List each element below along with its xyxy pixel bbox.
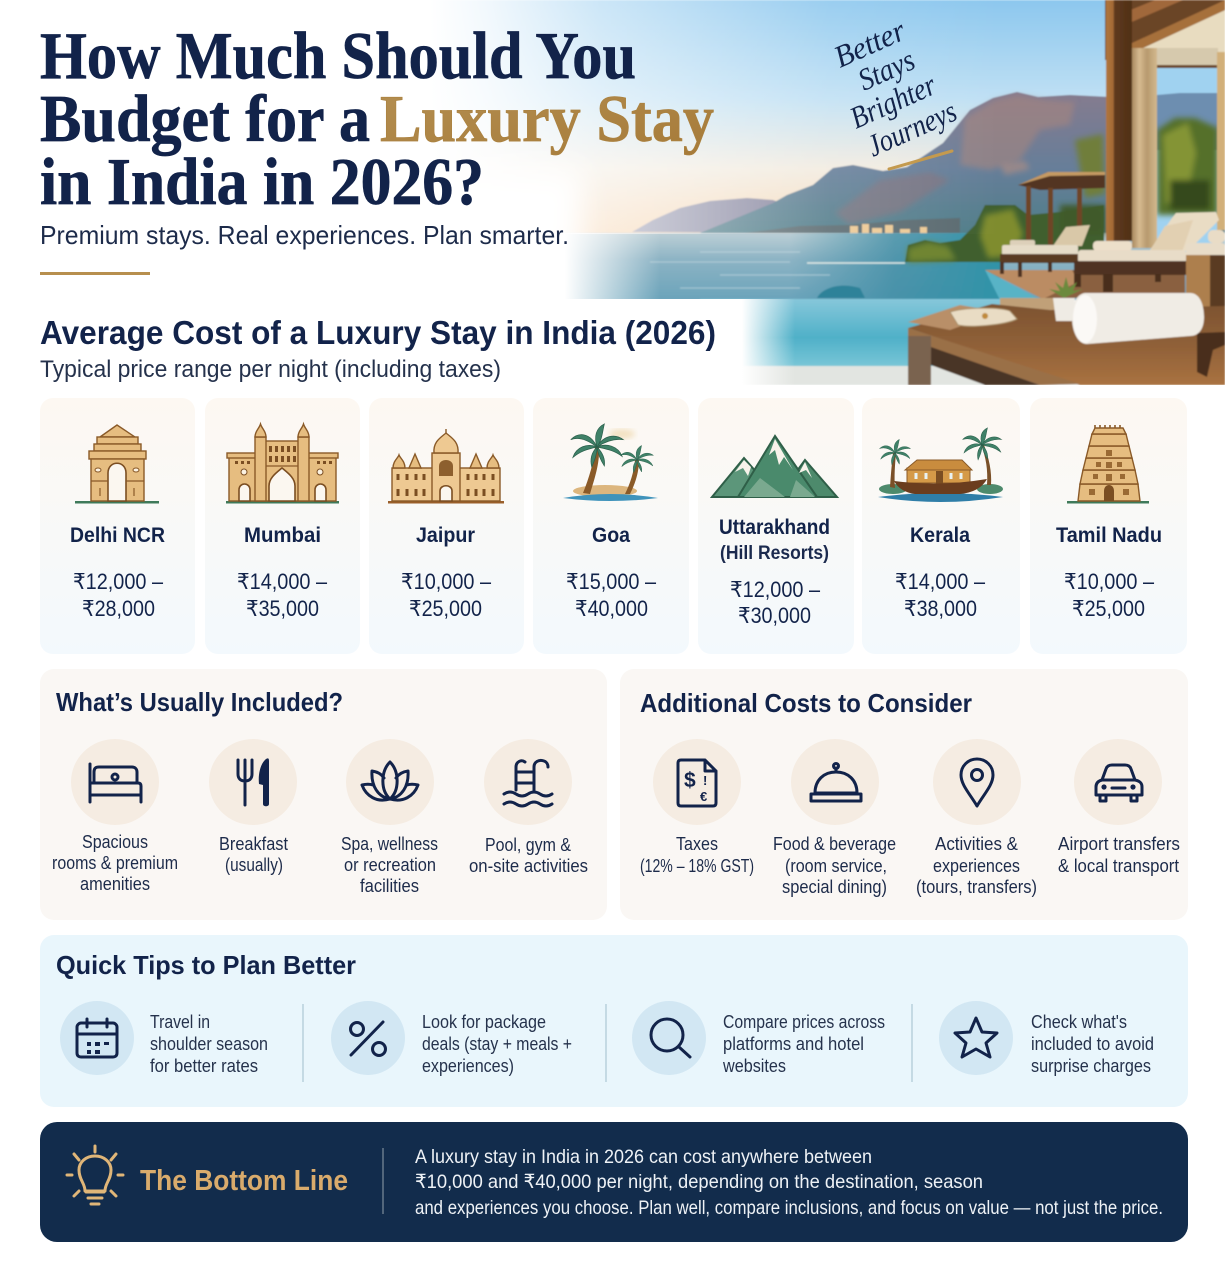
icon: light bulb	[67, 1146, 123, 1204]
card: Uttarakhand	[698, 398, 854, 654]
icon: mountains	[712, 436, 837, 497]
foliage behind terrace	[905, 205, 1104, 262]
handwritten tagline: Stays	[853, 42, 920, 97]
panel heading: Additional Costs to Consider	[640, 688, 972, 718]
tip text: included to avoid	[1031, 1034, 1154, 1054]
price range	[401, 569, 492, 621]
pergola	[1018, 172, 1105, 190]
label	[219, 834, 288, 875]
title: Budget for a	[40, 82, 370, 156]
item: rooms	[52, 739, 178, 894]
label: or recreation	[344, 855, 436, 875]
handwritten tagline	[829, 12, 962, 169]
label	[640, 834, 754, 876]
lounger 3	[1208, 230, 1225, 243]
bottom line text: ₹10,000 and ₹40,000 per night, depending on the destination, season	[415, 1171, 983, 1193]
tip text: websites	[722, 1056, 786, 1076]
item: taxes: !	[703, 773, 707, 788]
tip text: platforms and hotel	[723, 1034, 864, 1054]
handwritten tagline: Journeys	[862, 93, 962, 163]
hero photo: lake, mountains and resort terrace	[464, 0, 1225, 385]
price range	[730, 577, 821, 628]
lakeside village	[754, 218, 960, 233]
city name: Delhi NCR	[70, 524, 165, 547]
tip text: deals (stay + meals +	[422, 1034, 572, 1054]
title: in India in 2026?	[40, 145, 484, 219]
price range	[566, 569, 657, 621]
label	[773, 834, 896, 897]
panel: additional costs	[620, 669, 1188, 920]
infinity pool edge behind terrace	[986, 270, 1034, 298]
bottom line text: A luxury stay in India in 2026 can cost anywhere between	[415, 1146, 872, 1168]
panel: quick tips	[40, 935, 1188, 1107]
price range: ₹40,000	[575, 596, 648, 621]
tip text: Compare prices across	[723, 1012, 885, 1032]
title: How Much Should You	[40, 19, 636, 93]
handwritten tagline: Brighter	[845, 66, 942, 135]
card: Delhi NCR	[40, 398, 195, 654]
distant mountains	[632, 198, 776, 233]
price range: ₹30,000	[738, 603, 811, 628]
label: Breakfast	[219, 834, 288, 854]
city name: Goa	[592, 524, 630, 547]
city name: Tamil Nadu	[1056, 524, 1162, 547]
label: Airport transfers	[1058, 834, 1180, 854]
bottom line heading: The Bottom Line	[140, 1165, 348, 1197]
tip text: Look for package	[422, 1012, 546, 1032]
city name: (Hill Resorts)	[720, 542, 829, 564]
plant pot	[1053, 298, 1075, 321]
item: spa	[341, 739, 438, 896]
city name: Jaipur	[416, 524, 475, 547]
price range: ₹10,000 –	[401, 569, 492, 594]
price range: ₹12,000 –	[73, 569, 164, 594]
table	[999, 297, 1056, 311]
label: special dining)	[782, 877, 887, 897]
label: on-site activities	[469, 856, 588, 876]
label: (room service,	[785, 856, 887, 876]
label: rooms & premium	[52, 853, 178, 873]
price range: ₹14,000 –	[895, 569, 986, 594]
tip text	[150, 1012, 268, 1076]
label	[1058, 834, 1180, 876]
item: taxes	[640, 739, 754, 876]
tip text: Check what's	[1031, 1012, 1127, 1032]
price range: ₹35,000	[246, 596, 319, 621]
price range: ₹25,000	[1072, 596, 1145, 621]
price range	[73, 569, 164, 621]
icon: Gateway of India	[226, 424, 339, 504]
city name: Kerala	[910, 524, 970, 547]
panel heading: What’s Usually Included?	[56, 687, 343, 717]
label: facilities	[360, 876, 419, 896]
label	[469, 835, 588, 876]
handwritten tagline: Better	[829, 12, 911, 74]
panel: the bottom line	[40, 1122, 1188, 1242]
price range: ₹14,000 –	[237, 569, 328, 594]
item: transfers	[1058, 739, 1180, 876]
label: Spacious	[82, 832, 148, 852]
label	[916, 834, 1037, 897]
card: Kerala	[862, 398, 1020, 654]
price range: ₹15,000 –	[566, 569, 657, 594]
item: food	[773, 739, 896, 897]
terrace deck	[1045, 269, 1186, 299]
label	[341, 834, 438, 896]
label: Activities &	[935, 834, 1018, 854]
item: activities	[916, 739, 1037, 897]
bottom line text	[415, 1146, 1163, 1219]
panel heading: Quick Tips to Plan Better	[56, 950, 356, 980]
towel	[1072, 293, 1204, 344]
label: experiences	[933, 856, 1020, 876]
item: taxes: $	[684, 769, 696, 792]
item: taxes: €	[700, 789, 707, 804]
left white fades over the photo	[419, 0, 931, 234]
icon: India Gate	[75, 425, 159, 504]
subtitle: Premium stays. Real experiences. Plan smarter.	[40, 220, 569, 250]
tip text	[1031, 1012, 1154, 1076]
icon: houseboat	[878, 428, 1003, 502]
price range: ₹25,000	[409, 596, 482, 621]
label: Spa, wellness	[341, 834, 438, 854]
tip text: surprise charges	[1031, 1056, 1151, 1076]
label: amenities	[80, 874, 150, 894]
card: Tamil Nadu	[1030, 398, 1187, 654]
tip text	[422, 1012, 572, 1076]
price range	[237, 569, 328, 621]
label: (tours, transfers)	[916, 877, 1037, 897]
price range	[1064, 569, 1155, 621]
building column, beams, ceiling and opening	[1157, 66, 1218, 256]
label: Food & beverage	[773, 834, 896, 854]
city name: Mumbai	[244, 524, 321, 547]
tip: check inclusions	[939, 1001, 1154, 1076]
city name	[719, 516, 830, 564]
card: Mumbai	[205, 398, 360, 654]
tip text: Travel in	[150, 1012, 210, 1032]
section subheading: Typical price range per night (including taxes)	[40, 356, 501, 383]
label: Pool, gym &	[485, 835, 571, 855]
card: Jaipur	[369, 398, 524, 654]
tip: compare prices	[632, 1001, 885, 1076]
plate	[950, 308, 1017, 326]
label: (usually)	[225, 855, 283, 875]
icon: gopuram temple	[1067, 425, 1149, 504]
title	[40, 19, 714, 219]
title: Luxury Stay	[380, 82, 714, 156]
price range	[895, 569, 986, 621]
item: breakfast	[209, 739, 297, 875]
price range: ₹28,000	[82, 596, 155, 621]
panel: what's usually included	[40, 669, 607, 920]
lounger 1	[1053, 225, 1090, 246]
label: Taxes	[676, 834, 718, 854]
tip: shoulder season	[60, 1001, 268, 1076]
tip text: for better rates	[150, 1056, 258, 1076]
gold rule	[40, 272, 150, 275]
card: Goa	[533, 398, 689, 654]
price range: ₹38,000	[904, 596, 977, 621]
price range: ₹10,000 –	[1064, 569, 1155, 594]
label: (12% – 18% GST)	[640, 856, 754, 876]
label	[52, 832, 178, 894]
tip text: shoulder season	[150, 1034, 268, 1054]
icon: Jaipur palace	[388, 429, 504, 504]
section heading: average cost: Average Cost of a Luxury Stay in India (2026)	[40, 314, 716, 351]
tip text: experiences)	[422, 1056, 514, 1076]
tip: package deals	[331, 1001, 572, 1076]
label: & local transport	[1058, 856, 1179, 876]
tip text	[722, 1012, 885, 1076]
lounger 2	[1150, 212, 1219, 251]
icon: palm island	[563, 424, 658, 501]
city name: Uttarakhand	[719, 516, 830, 539]
price range: ₹12,000 –	[730, 577, 821, 602]
lower pool water	[700, 298, 1001, 367]
item: pool	[469, 739, 588, 876]
